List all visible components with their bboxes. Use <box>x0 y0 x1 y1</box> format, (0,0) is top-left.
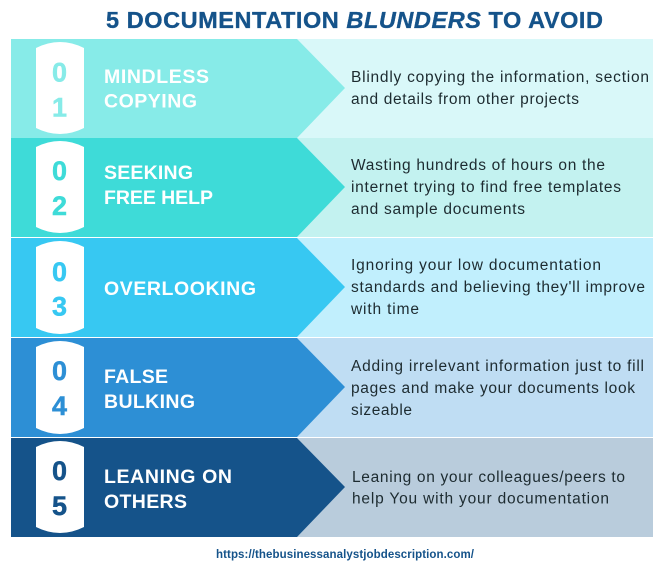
text: description 5: help You with your documentation <box>352 490 609 508</box>
heading: mindless copying <box>104 66 209 112</box>
icon: number badge 01 <box>36 42 84 134</box>
text: description 2: Wasting hundreds of hours on the <box>351 157 605 174</box>
source url: https://thebusinessanalystjobdescription.com/ <box>216 549 475 561</box>
title: 5 DOCUMENTATION BLUNDERS TO AVOID <box>106 7 603 33</box>
text: description 1: and details from other projects <box>351 91 579 108</box>
text: description 2 <box>351 157 621 218</box>
text: description 2: and sample documents <box>351 201 525 218</box>
panel: 01 mindless copying <box>11 39 653 138</box>
icon: number badge 01: 1 <box>52 92 67 122</box>
heading: leaning on others: OTHERS <box>104 491 187 513</box>
icon: number badge 05 <box>36 441 84 533</box>
icon: number badge 05: 0 <box>52 456 67 486</box>
text: description 3 <box>350 257 645 318</box>
text: description 3: standards and believing they'll improve <box>351 279 645 296</box>
text: description 2: internet trying to find free templates <box>351 179 621 196</box>
heading: false bulking: BULKING <box>104 391 195 413</box>
heading: seeking free help: FREE HELP <box>104 187 213 209</box>
icon: number badge 01: 0 <box>52 58 67 88</box>
icon: number badge 04: 4 <box>52 391 67 421</box>
text: description 5 <box>352 469 625 508</box>
icon: number badge 02: 0 <box>52 156 67 186</box>
text: description 3: Ignoring your low documentation <box>351 257 601 274</box>
panel: 05 leaning on others <box>11 438 653 537</box>
text: description 4: Adding irrelevant information just to fill <box>351 358 644 375</box>
icon: number badge 03 <box>36 241 84 334</box>
icon: number badge 04 <box>36 341 84 434</box>
text: description 1: Blindly copying the information, section <box>351 69 649 86</box>
text: description 3: with time <box>350 301 419 318</box>
icon: number badge 02: 2 <box>52 191 67 221</box>
text: description 4 <box>351 358 644 419</box>
heading: seeking free help <box>104 162 213 209</box>
text: description 4: pages and make your documents look <box>351 380 635 397</box>
panel: 02 seeking free help <box>11 138 653 237</box>
icon: number badge 04: 0 <box>52 356 67 386</box>
text: description 4: sizeable <box>351 402 412 419</box>
heading: false bulking: FALSE <box>104 366 168 388</box>
heading: false bulking <box>104 366 195 413</box>
icon: number badge 03: 0 <box>52 257 67 287</box>
panel: 04 false bulking <box>11 338 653 437</box>
heading: seeking free help: SEEKING <box>104 162 193 184</box>
panel: 03 overlooking <box>11 238 653 337</box>
text: description 1 <box>351 69 649 108</box>
text: description 5: Leaning on your colleagues/peers to <box>352 469 625 486</box>
heading: leaning on others: LEANING ON <box>104 466 232 488</box>
icon: number badge 03: 3 <box>52 292 67 322</box>
heading: leaning on others <box>104 466 232 513</box>
heading: overlooking: OVERLOOKING <box>104 278 256 300</box>
heading: mindless copying: MINDLESS <box>104 66 209 88</box>
heading: mindless copying: COPYING <box>104 90 197 112</box>
icon: number badge 05: 5 <box>52 491 67 521</box>
icon: number badge 02 <box>36 141 84 233</box>
